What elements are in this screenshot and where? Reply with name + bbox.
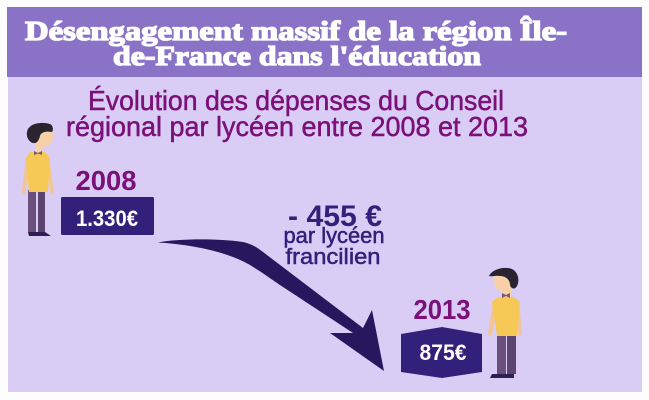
icon: student 2013 xyxy=(488,268,522,378)
label: year 2008: 2008 xyxy=(76,165,136,196)
panel: header band xyxy=(7,7,642,77)
callout: minus 455 euros per student: - 455 € xyxy=(288,200,382,233)
icon: student 2008 xyxy=(22,123,54,236)
subtitle xyxy=(66,85,528,142)
arrow: decrease xyxy=(158,239,384,371)
value box: 2013: 875€ xyxy=(420,340,466,365)
label: year 2013: 2013 xyxy=(414,294,470,325)
value box: 2013 xyxy=(401,327,482,378)
title xyxy=(25,16,567,71)
value box: 2008 xyxy=(61,197,154,235)
subtitle: Évolution des dépenses du Conseil xyxy=(88,85,504,116)
callout: minus 455 euros per student: par lycéen xyxy=(284,223,384,248)
title: Désengagement massif de la région Île- xyxy=(25,16,567,46)
panel: body background xyxy=(8,77,642,392)
callout: minus 455 euros per student xyxy=(284,200,384,269)
callout: minus 455 euros per student: francilien xyxy=(286,244,380,269)
value box: 2008: 1.330€ xyxy=(76,206,138,231)
subtitle: régional par lycéen entre 2008 et 2013 xyxy=(66,111,528,142)
title: de-France dans l'éducation xyxy=(113,41,481,71)
